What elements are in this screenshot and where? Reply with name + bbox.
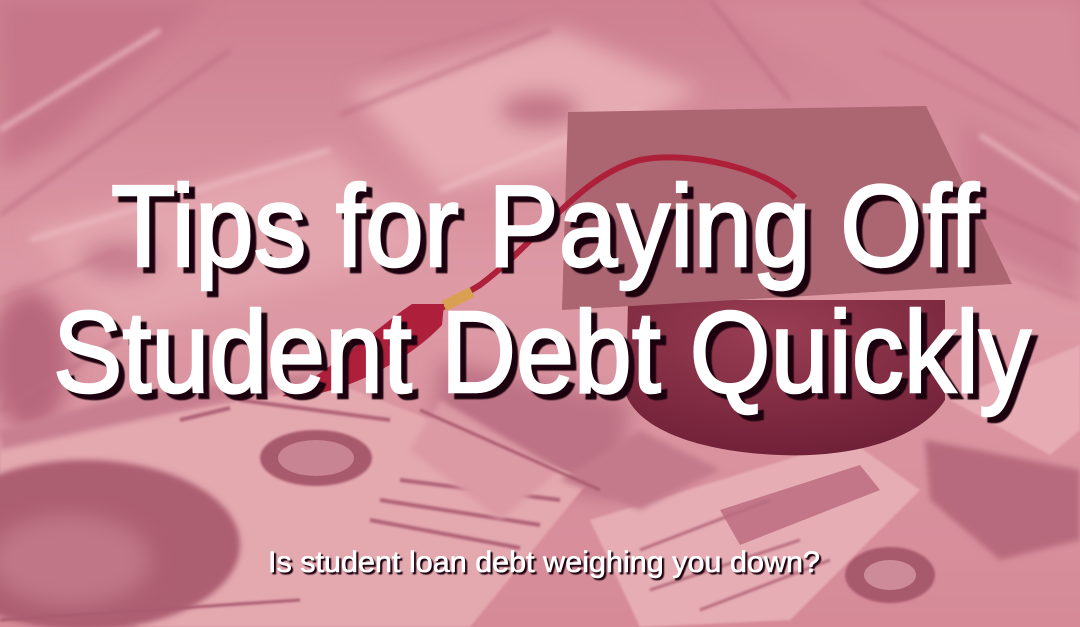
subtitle [268, 546, 822, 581]
cap board [562, 106, 1012, 310]
red cord [425, 157, 795, 318]
subtitle text: Is student loan debt weighing you down? [268, 546, 820, 579]
title [53, 161, 1037, 423]
gold knot [444, 292, 472, 306]
banknote edges [0, 0, 1080, 410]
foreground banknote [0, 385, 590, 627]
cap base [626, 300, 945, 455]
tassel [282, 304, 444, 397]
portrait on foreground note [0, 460, 240, 627]
title line 1: Tips for Paying Off [111, 161, 980, 291]
seal on foreground note [260, 430, 372, 486]
subtitle shadow: Is student loan debt weighing you down? [270, 548, 822, 581]
title line 1 shadow: Tips for Paying Off [117, 167, 986, 297]
graduation cap [282, 106, 1012, 455]
